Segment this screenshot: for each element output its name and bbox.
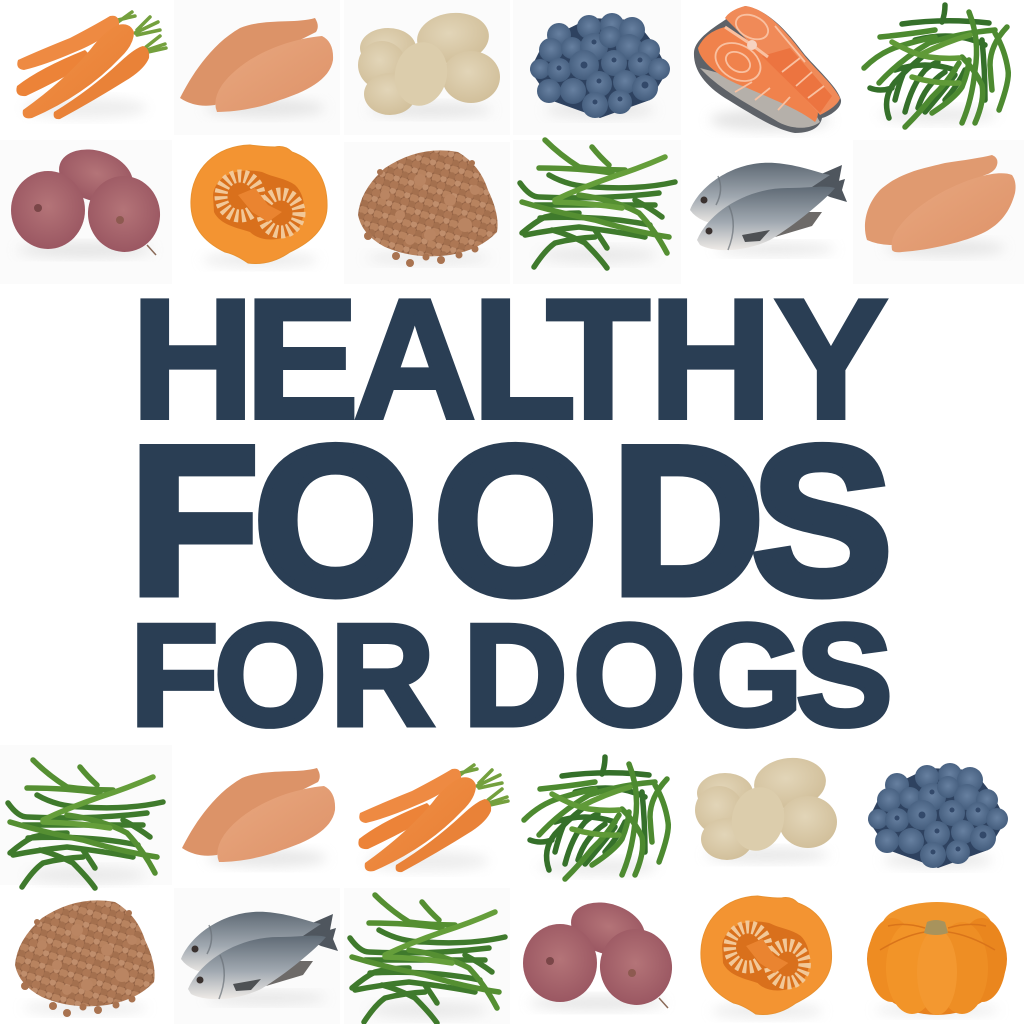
food: sweet potatoes xyxy=(182,768,335,867)
food: blueberries xyxy=(530,13,670,118)
food: potatoes xyxy=(695,754,837,862)
title line: For Dogs: FOR DOGS xyxy=(130,594,893,756)
food: lentils xyxy=(358,150,498,267)
food: whole fish xyxy=(181,912,338,1004)
food: green beans spread xyxy=(520,140,675,268)
panel: top food grid xyxy=(11,5,1016,268)
food: blueberries xyxy=(868,763,1008,868)
food: red potatoes xyxy=(523,893,677,1010)
food: carrots xyxy=(16,12,166,119)
food: carrots xyxy=(358,765,508,872)
food: green beans spread xyxy=(8,760,163,888)
title line: Foods: FOODS xyxy=(130,403,892,638)
food: lentils xyxy=(15,900,155,1017)
food: sweet potatoes xyxy=(180,18,333,117)
food: green beans xyxy=(864,5,1008,127)
food: whole fish xyxy=(690,163,847,255)
food: cut squash xyxy=(191,145,327,267)
panel: bottom food grid xyxy=(8,754,1008,1023)
food: red potatoes xyxy=(11,140,165,257)
food: pumpkin xyxy=(867,902,1007,1016)
food: sweet potatoes second xyxy=(865,155,1016,256)
food: cut squash xyxy=(701,896,832,1018)
food: salmon steak xyxy=(694,6,841,133)
title line: Healthy: HEALTHY xyxy=(131,264,888,455)
food: potatoes xyxy=(358,9,500,117)
title xyxy=(130,264,893,756)
food: green beans xyxy=(524,757,668,879)
food: green beans spread xyxy=(350,895,505,1023)
